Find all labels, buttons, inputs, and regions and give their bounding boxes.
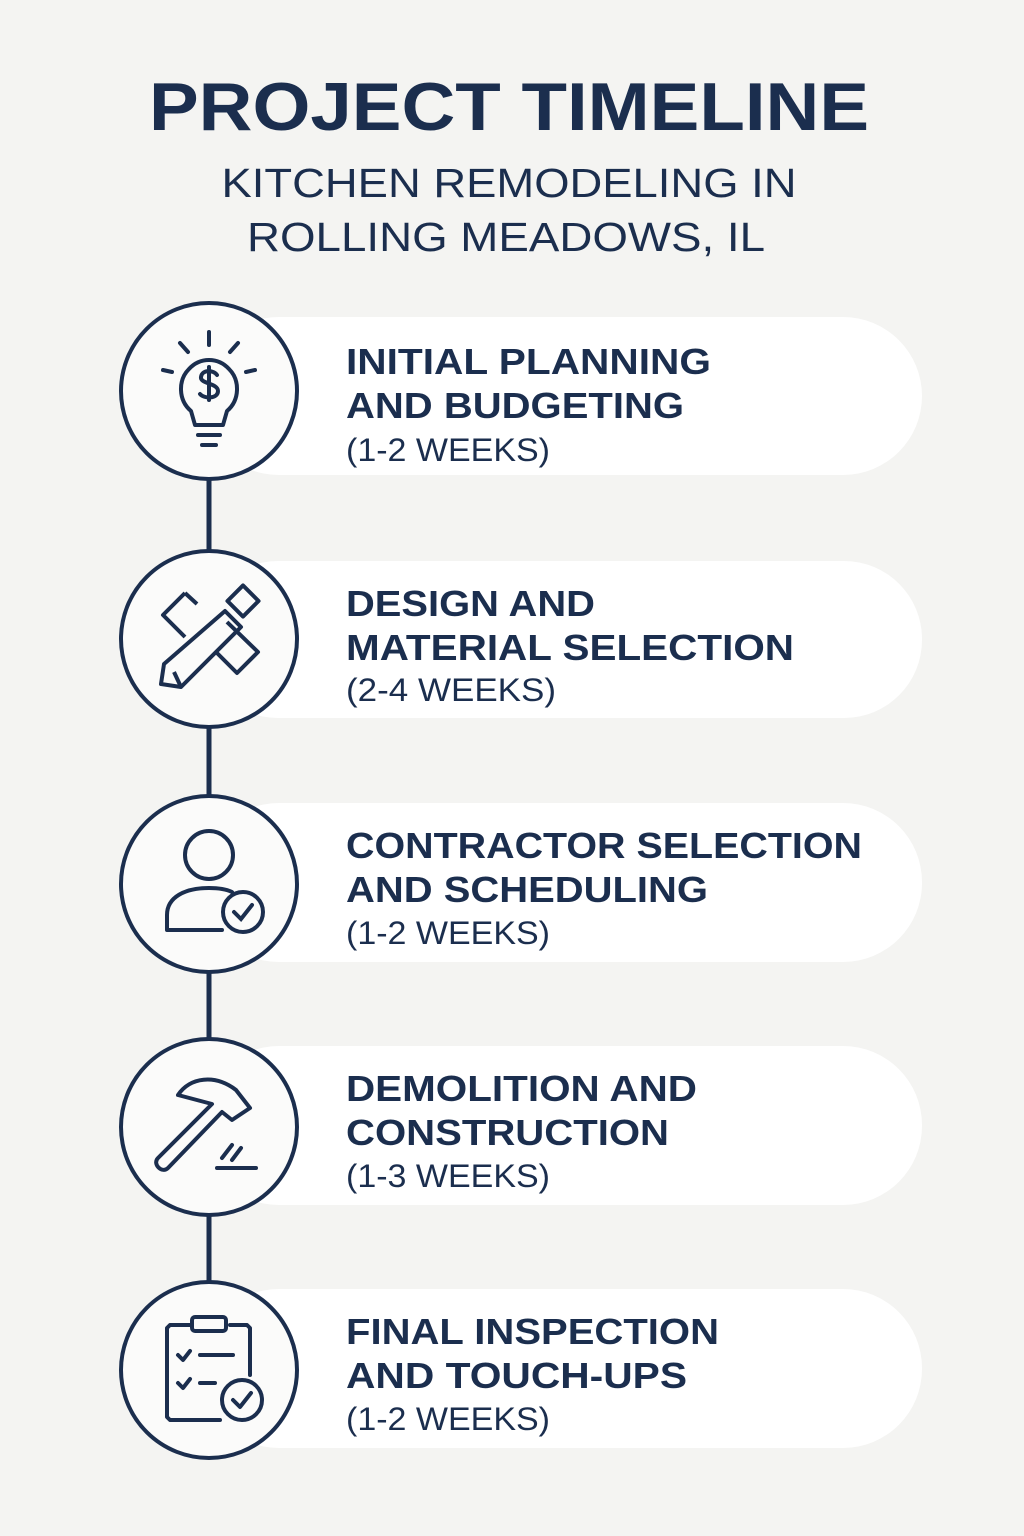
icon: hammer: [121, 1039, 297, 1215]
card 1: [200, 317, 922, 475]
card 3: [200, 803, 922, 962]
title: PROJECT TIMELINE: [149, 69, 869, 145]
card 3: CONTRACTOR SELECTION: [346, 825, 862, 866]
icon: clipboard with check: [121, 1282, 297, 1458]
card 5: [200, 1289, 922, 1448]
card 3: (1-2 WEEKS): [346, 915, 550, 951]
card 4: (1-3 WEEKS): [346, 1158, 550, 1194]
card 3: AND SCHEDULING: [346, 869, 708, 910]
connector line: [206, 470, 212, 1300]
card 4: [200, 1046, 922, 1205]
subtitle: [222, 160, 796, 260]
card 2: [200, 561, 922, 718]
card 4: CONSTRUCTION: [346, 1112, 669, 1153]
card 5: AND TOUCH-UPS: [346, 1355, 687, 1396]
subtitle: KITCHEN REMODELING IN: [222, 160, 796, 206]
card 1: INITIAL PLANNING: [346, 341, 711, 382]
card 2: DESIGN AND: [346, 583, 595, 624]
icon: lightbulb with dollar: [121, 303, 297, 479]
card 4: DEMOLITION AND: [346, 1068, 697, 1109]
card 5: FINAL INSPECTION: [346, 1311, 719, 1352]
icon: pencil and ruler: [121, 551, 297, 727]
subtitle: ROLLING MEADOWS, IL: [247, 214, 765, 260]
icon: person with check: [121, 796, 297, 972]
card 2: MATERIAL SELECTION: [346, 627, 794, 668]
card 1: AND BUDGETING: [346, 385, 684, 426]
card 2: (2-4 WEEKS): [346, 672, 556, 708]
card 1: (1-2 WEEKS): [346, 432, 550, 468]
card 5: (1-2 WEEKS): [346, 1401, 550, 1437]
